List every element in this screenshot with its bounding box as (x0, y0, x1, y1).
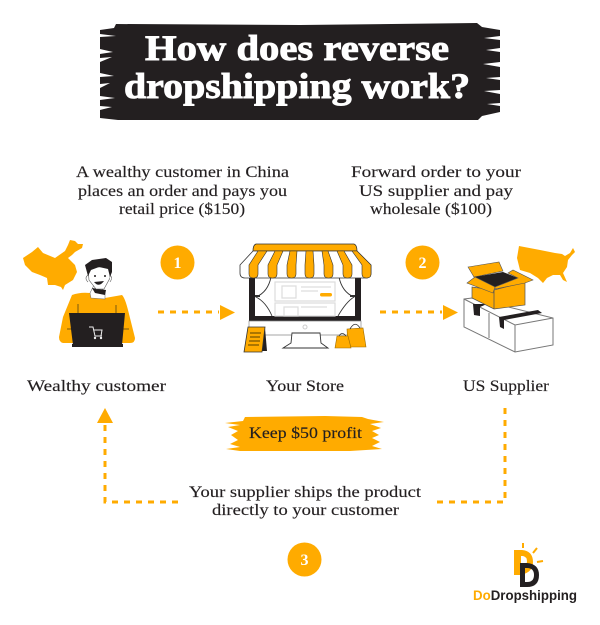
icon: online store (240, 244, 371, 352)
step 1 description: A wealthy customer in China (76, 164, 289, 181)
step 3 badge (288, 542, 322, 576)
arrow: customer to store (158, 305, 235, 320)
neck and collar (90, 285, 105, 299)
logo (473, 543, 577, 603)
title banner (100, 23, 500, 120)
return arrow: supplier to customer (436, 408, 505, 502)
logo mark (514, 550, 533, 575)
profit text: Keep $50 profit (249, 425, 363, 442)
hair (85, 258, 112, 277)
shirt (59, 293, 135, 343)
arrow: store to supplier (380, 305, 458, 320)
shopping bags (347, 328, 366, 347)
stand (283, 333, 328, 348)
open box (472, 282, 525, 309)
step 1 description: retail price ($150) (119, 201, 245, 218)
ears (86, 275, 112, 282)
return arrow: to customer (97, 408, 178, 502)
awning stripes (240, 251, 371, 278)
icon: US supplier boxes and map (464, 246, 575, 352)
curtains (256, 277, 354, 316)
step 2 badge (406, 246, 440, 280)
icon: wealthy customer with China map (23, 240, 135, 347)
label: US supplier: US Supplier (463, 378, 550, 395)
smile (94, 281, 104, 285)
cart (89, 327, 102, 336)
label: your store: Your Store (266, 378, 344, 395)
awning top (253, 244, 357, 251)
step 2 badge: 2 (418, 255, 426, 272)
logo text: DoDropshipping (473, 587, 577, 603)
USA map (517, 246, 575, 283)
face (88, 266, 110, 289)
sign board (258, 328, 267, 351)
label: wealthy customer: Wealthy customer (27, 378, 167, 395)
step 2 description: Forward order to your (351, 164, 522, 181)
step 1 description: places an order and pays you (78, 183, 287, 200)
step 3 description: Your supplier ships the product (189, 484, 422, 501)
screen content (275, 282, 335, 316)
monitor (249, 272, 361, 321)
title text: dropshipping work? (124, 66, 470, 106)
step 3 badge: 3 (300, 552, 308, 569)
step 1 badge (160, 246, 194, 280)
arm lines (67, 304, 129, 329)
China map (23, 240, 83, 290)
profit banner (225, 416, 384, 451)
step 3 description: directly to your customer (212, 502, 400, 519)
tape (473, 304, 487, 316)
step 2 description: US supplier and pay (359, 183, 513, 200)
title text: How does reverse (145, 28, 449, 68)
lower boxes (464, 298, 553, 352)
laptop (69, 313, 125, 345)
step 1 badge: 1 (174, 255, 182, 272)
step 2 description: wholesale ($100) (370, 201, 492, 218)
